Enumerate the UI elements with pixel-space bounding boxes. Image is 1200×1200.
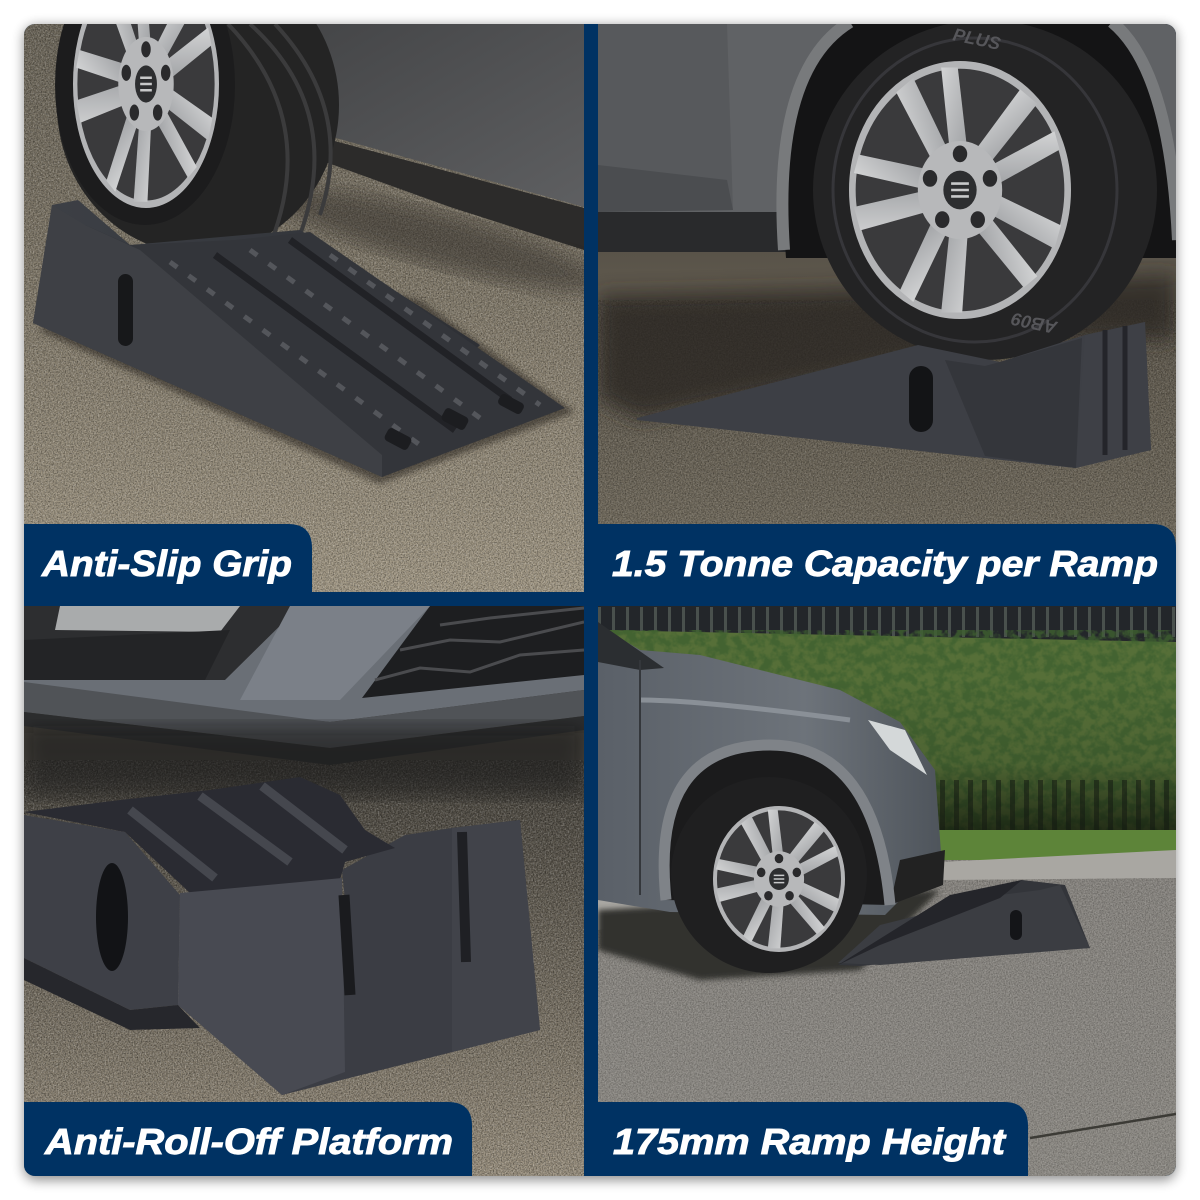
fence: [598, 606, 1176, 642]
tyre: [813, 20, 1157, 360]
panel: ramp height photo: [598, 606, 1176, 1176]
lawn: [930, 830, 1176, 860]
ramp: [24, 777, 540, 1095]
ramp: [637, 322, 1151, 468]
label: Anti-Slip Grip: Anti-Slip Grip: [41, 543, 292, 584]
label: 1.5 Tonne Capacity per Ramp: [598, 524, 1176, 592]
car bumper: [24, 606, 584, 722]
wheel rim: [849, 61, 1071, 319]
car sill: [328, 141, 584, 250]
car door: [316, 24, 584, 207]
tyre: [674, 900, 862, 973]
wheel rim: [73, 24, 219, 208]
tyre: PLUS: [951, 24, 1002, 54]
ground shadow: [598, 275, 1176, 420]
panel: capacity photo: [598, 20, 1178, 592]
car body: [614, 24, 1176, 212]
ramp: [838, 880, 1090, 966]
panel: anti-slip grip photo: [24, 0, 611, 592]
panel: anti-roll-off platform photo: [24, 606, 584, 1176]
tyre: [55, 24, 339, 244]
ramp: [33, 200, 565, 477]
crack: [1030, 1114, 1176, 1138]
ramp shadow: [38, 291, 576, 486]
driveway shade: [598, 850, 1176, 930]
tyre: AB09: [1010, 309, 1060, 338]
hedge: [600, 630, 1176, 832]
label: Anti-Roll-Off Platform: Anti-Roll-Off Platform: [44, 1121, 453, 1162]
label: 1.5 Tonne Capacity per Ramp: 1.5 Tonne Capacity per Ramp: [612, 543, 1158, 584]
label: Anti-Slip Grip: [24, 524, 312, 592]
wheel rim: [713, 806, 845, 952]
car shadow: [598, 890, 940, 980]
label: Anti-Roll-Off Platform: [24, 1102, 472, 1176]
label: 175mm Ramp Height: 175mm Ramp Height: [613, 1121, 1007, 1162]
car body: [598, 622, 945, 915]
wheel arch: [784, 24, 1176, 258]
label: 175mm Ramp Height: [584, 1102, 1028, 1176]
